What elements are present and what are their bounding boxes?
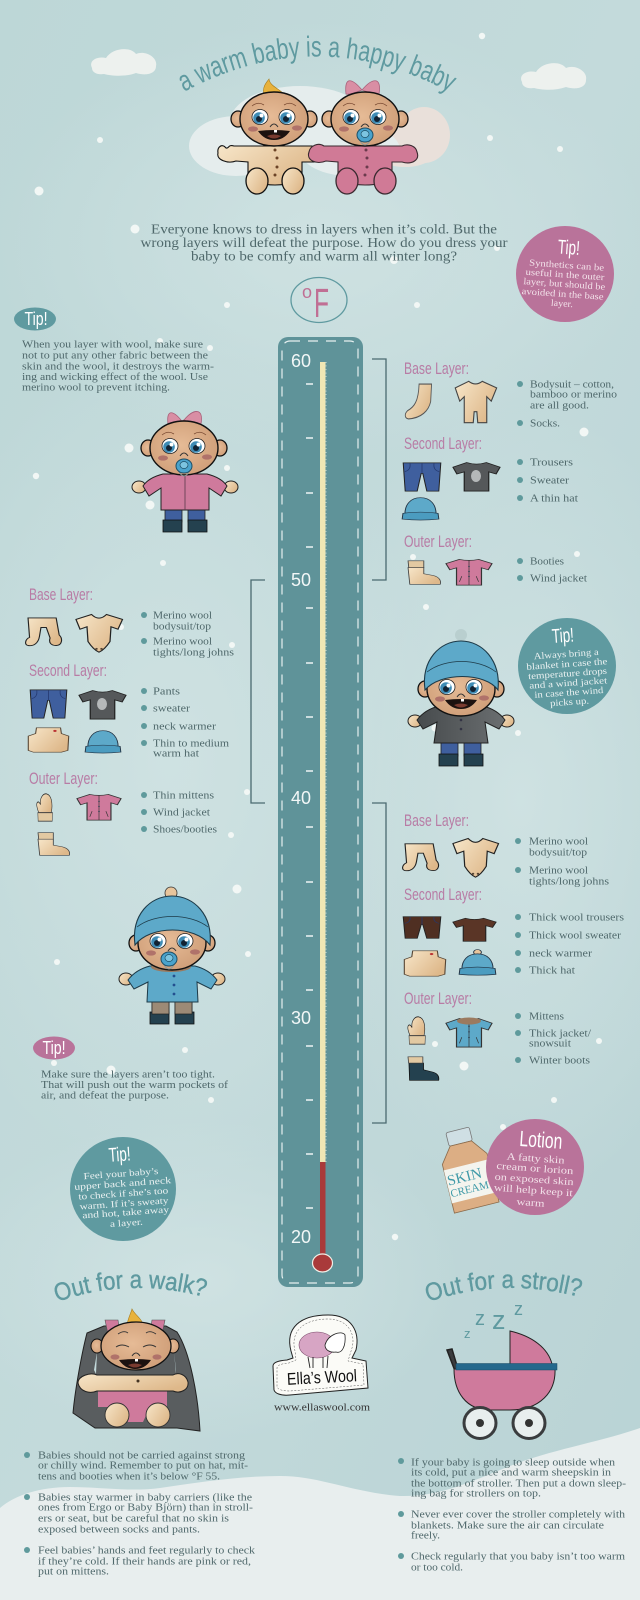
tip: synthetics: layer. — [551, 299, 573, 310]
tip: blanket: and a wind jacket — [529, 676, 608, 692]
tip: blanket: in case the wind — [534, 686, 604, 701]
lotion callout: cream or lorion — [496, 1161, 574, 1177]
baby in blue jacket — [119, 887, 225, 1024]
stroll advice list: blankets. Make sure the air can circulate — [411, 1520, 604, 1532]
tip: check warmth: a layer. — [110, 1218, 143, 1230]
heading: base layer: Base Layer: — [404, 359, 469, 378]
tip: check warmth: Tip! — [108, 1143, 131, 1167]
walk advice list: or chilly wind. Remember to put on hat, mit- — [38, 1460, 249, 1472]
icon: winter boot — [408, 1057, 439, 1080]
tip: synthetics: avoided in the base — [521, 287, 604, 303]
tip: synthetics: useful in the outer — [525, 267, 606, 283]
stroll advice list: or too cold. — [411, 1562, 463, 1574]
sleeping z letters: z — [464, 1326, 470, 1341]
icon: hat — [85, 731, 121, 753]
tip: blanket: picks up. — [550, 697, 589, 709]
stroll advice list: Never ever cover the stroller completely with — [411, 1510, 626, 1520]
carrier straps and panel — [73, 1320, 200, 1431]
base list — [517, 380, 617, 430]
baby boy — [218, 79, 317, 194]
base list — [515, 836, 609, 888]
scale numbers: 40 — [291, 788, 311, 808]
temperature brackets — [251, 359, 386, 1123]
outer list: Winter boots — [529, 1056, 590, 1066]
tip: not too tight: air, and defeat the purpose. — [41, 1090, 169, 1102]
icon: grey sweater — [79, 691, 126, 719]
icon: skin cream bottle — [435, 1124, 499, 1213]
scale numbers: 60 — [291, 351, 311, 371]
clouds behind babies — [189, 86, 450, 176]
heading: outer layer: Outer Layer: — [404, 989, 472, 1008]
tip: blanket: Always bring a — [533, 648, 599, 662]
heading: base layer: Base Layer: — [29, 585, 93, 604]
walk advice list: exposed between socks and pants. — [38, 1524, 200, 1536]
sleeping z letters: z — [492, 1305, 506, 1335]
tip: layering wool: When you layer with wool, make sure — [22, 340, 203, 350]
scale numbers: 30 — [291, 1008, 311, 1028]
base list: tights/long johns — [153, 648, 234, 658]
stroller — [447, 1331, 557, 1438]
walk advice list: if they’re cold. If their hands are pink or red, — [38, 1556, 251, 1568]
intro text: baby to be comfy and warm all winter long? — [191, 248, 457, 264]
stroll advice list: freely. — [411, 1530, 440, 1542]
heading: outer layer: Outer Layer: — [29, 769, 98, 788]
base list: Bodysuit – cotton, — [530, 380, 614, 390]
tip: layering wool: Tip! — [24, 309, 48, 329]
baby in grey jacket and hat — [408, 629, 514, 766]
icon: long bodysuit — [455, 381, 497, 423]
tip: blanket: blanket in case the — [526, 657, 608, 673]
snowflakes — [33, 33, 602, 1240]
base list: tights/long johns — [529, 876, 609, 888]
second list: Thick wool trousers — [529, 912, 624, 924]
tip: check warmth: warm. If it’s sweaty — [79, 1195, 169, 1213]
outer list: snowsuit — [529, 1038, 571, 1050]
second list: warm hat — [153, 748, 199, 760]
second list: sweater — [153, 704, 191, 714]
tip: check warmth: to check if she’s too — [78, 1185, 169, 1203]
tip: blanket: temperature drops — [528, 667, 608, 682]
heading: second layer: Second Layer: — [29, 661, 107, 680]
icon: jeans — [30, 690, 67, 718]
second list: Thin to medium — [153, 738, 229, 750]
icon: brown sweater — [453, 918, 496, 941]
stroll advice list: Check regularly that you baby isn’t too warm — [411, 1552, 625, 1562]
lotion callout: A fatty skin — [506, 1152, 565, 1167]
second list: neck warmer — [529, 948, 593, 960]
base list: Merino wool — [153, 636, 212, 648]
outer list: Mittens — [529, 1012, 564, 1022]
heading: out for a walk: Out for a walk? — [54, 1272, 208, 1300]
lotion callout — [486, 1119, 584, 1215]
tip: synthetics: layer, but should be — [523, 277, 605, 293]
heading: outer layer: Outer Layer: — [404, 532, 472, 551]
icon: pink jacket — [77, 794, 121, 820]
Fahrenheit badge: F — [314, 280, 329, 326]
logo: Ella's Wool: Ella’s Wool — [287, 1366, 357, 1389]
icon: thin hat — [402, 498, 439, 520]
scale numbers: 50 — [291, 570, 311, 590]
icon: neck warmer — [28, 728, 69, 752]
icon: onesie — [76, 614, 122, 652]
second list: Trousers — [530, 458, 573, 468]
tip: not too tight: Tip! — [42, 1038, 66, 1058]
outer list: Shoes/booties — [153, 824, 217, 836]
second list — [515, 912, 624, 976]
Fahrenheit badge — [291, 278, 347, 326]
icon: mitten — [37, 794, 53, 821]
icon: hat with pompom — [459, 950, 496, 975]
mercury tube — [312, 362, 332, 1272]
second list: A thin hat — [530, 494, 578, 504]
outer list — [515, 1012, 591, 1066]
base list: bamboo or merino — [530, 390, 617, 400]
logo: Ella's Wool — [273, 1315, 368, 1395]
tip: synthetics: Synthetics can be — [529, 258, 604, 274]
sleeping z letters: z — [514, 1299, 523, 1319]
outer list: Thin mittens — [153, 790, 214, 802]
icon: onesie — [453, 839, 499, 877]
base list: Merino wool — [153, 610, 212, 622]
second list — [517, 458, 578, 504]
scale numbers: 20 — [291, 1227, 311, 1247]
tip: layering wool: skin and the wool, it destroys the warm- — [22, 362, 215, 372]
lotion callout: on exposed skin — [494, 1172, 574, 1188]
walk advice list — [24, 1450, 256, 1578]
tip: check warmth: and hot, take away — [82, 1205, 170, 1221]
icon: trousers — [403, 463, 441, 491]
tip: blanket: Tip! — [551, 624, 575, 648]
icon: blue jacket — [446, 1018, 492, 1047]
panel: 40-50 layers — [26, 585, 234, 855]
icon: skin cream bottle: SKIN — [446, 1166, 484, 1190]
intro text: wrong layers will defeat the purpose. How do you dress your — [140, 235, 508, 250]
base list: Merino wool — [529, 866, 588, 876]
outer list: Wind jacket — [530, 574, 587, 584]
icon: grey sweater — [453, 463, 500, 491]
panel: 50-60 layers — [402, 359, 617, 585]
intro text: Everyone knows to dress in layers when it’s cold. But the — [151, 222, 497, 236]
outer list: Thick jacket/ — [529, 1028, 591, 1040]
heading: second layer: Second Layer: — [404, 434, 482, 453]
baby in carrier — [73, 1309, 200, 1431]
walk advice list: ones from Ergo or Baby Björn) than in stroll- — [38, 1502, 254, 1514]
cloud left — [91, 49, 156, 76]
lotion callout: Lotion — [519, 1126, 563, 1154]
intro text — [140, 222, 508, 264]
stroll advice list: If your baby is going to sleep outside when — [411, 1458, 616, 1468]
heading: base layer: Base Layer: — [404, 811, 469, 830]
icon: bootie — [38, 833, 70, 855]
stroll advice list: the bottom of stroller. Then put a down sleep- — [411, 1478, 627, 1490]
scale numbers — [291, 351, 311, 1247]
icon: tights — [26, 618, 62, 646]
icon: neck warmer — [404, 951, 446, 976]
base list: Socks. — [530, 418, 560, 430]
tip: synthetics — [516, 226, 614, 322]
heading: second layer: Second Layer: — [404, 885, 482, 904]
boy and girl babies — [218, 79, 418, 194]
walk advice list: Feel babies’ hands and feet regularly to check — [38, 1546, 256, 1556]
Fahrenheit badge: o — [302, 282, 312, 302]
baby girl in jacket — [132, 411, 238, 532]
thermometer — [278, 337, 363, 1287]
sleeping z letters: z — [475, 1308, 485, 1330]
base list: Merino wool — [529, 836, 588, 848]
stroll advice list: its cold, put a nice and warm sheepskin in — [411, 1468, 612, 1478]
second list: Sweater — [530, 476, 570, 486]
outer list: Wind jacket — [153, 808, 210, 818]
icon: bootie — [408, 561, 441, 584]
sleeping z letters — [464, 1299, 523, 1341]
outer list — [141, 790, 217, 836]
panel: below 40 layers — [403, 811, 624, 1080]
base list: bodysuit/top — [153, 622, 211, 632]
website url: www.ellaswool.com — [274, 1402, 370, 1414]
tip: not too tight — [33, 1036, 229, 1102]
heading: out for a stroll: Out for a stroll? — [426, 1272, 582, 1300]
tip: layering wool: not to put any other fabric between the — [22, 350, 208, 362]
walk advice list: tens and booties when it’s below °F 55. — [38, 1472, 220, 1482]
walk advice list: Babies stay warmer in baby carriers (like the — [38, 1492, 252, 1504]
walk advice list: Babies should not be carried against strong — [38, 1450, 245, 1462]
icon: brown trousers — [403, 917, 441, 938]
title: a warm baby is a happy baby — [180, 36, 457, 94]
second list: Pants — [153, 686, 180, 698]
second list — [141, 686, 229, 760]
tip: check warmth: upper back and neck — [74, 1176, 172, 1193]
base list: bodysuit/top — [529, 848, 587, 858]
second list: Thick hat — [529, 966, 575, 976]
icon: mitten — [408, 1017, 425, 1044]
walk advice list: ers or seat, but be careful that no skin is — [38, 1514, 229, 1524]
scale ticks — [306, 384, 313, 1208]
icon: sock — [405, 384, 432, 419]
tip: check warmth — [70, 1137, 176, 1241]
cloud right — [521, 63, 586, 90]
walk advice list: put on mittens. — [38, 1566, 109, 1578]
tip: not too tight: Make sure the layers aren’t too tight. — [41, 1070, 215, 1080]
lotion callout: warm — [516, 1197, 545, 1210]
second list: Thick wool sweater — [529, 930, 622, 942]
tip: synthetics: Tip! — [557, 236, 581, 260]
snow wave — [0, 1428, 640, 1600]
lotion callout: will help keep it — [494, 1183, 573, 1199]
second list: neck warmer — [153, 722, 217, 732]
icon: tights — [403, 844, 439, 871]
tip: not too tight: That will push out the warm pockets of — [41, 1080, 229, 1091]
stroll advice list — [398, 1458, 627, 1574]
icon: skin cream bottle: CREAM — [449, 1179, 490, 1200]
outer list: Booties — [530, 556, 564, 568]
tip: layering wool: ing and wicking effect of the wool. Use — [22, 372, 208, 383]
outer list — [517, 556, 587, 584]
base list — [141, 610, 234, 658]
tip: layering wool — [14, 308, 215, 394]
tip: check warmth: Feel your baby’s — [83, 1167, 159, 1182]
stroll advice list: ing bag for strollers on top. — [411, 1488, 541, 1500]
icon: pink jacket — [446, 559, 492, 585]
baby girl — [308, 81, 418, 194]
base list: are all good. — [530, 400, 589, 412]
tip: blanket — [518, 618, 616, 714]
tip: layering wool: merino wool to prevent itching. — [22, 382, 170, 394]
